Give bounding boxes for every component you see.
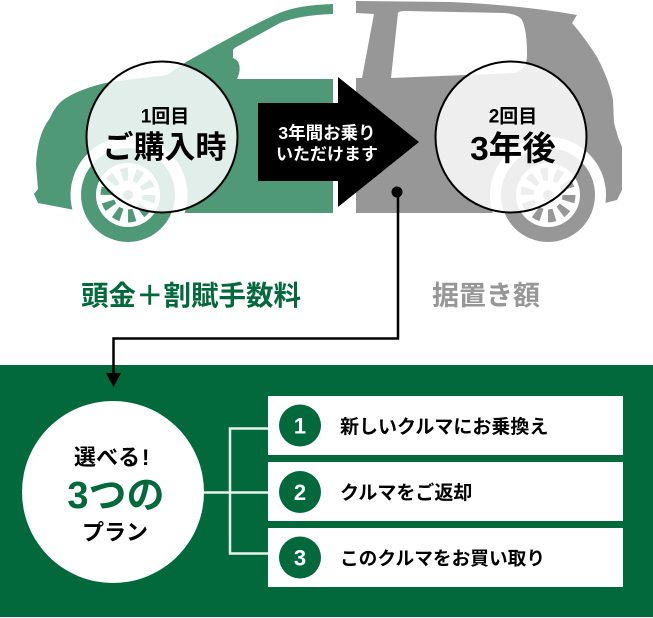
panel: plans bbox=[0, 365, 653, 617]
plan 1: 新しいクルマにお乗換え bbox=[340, 415, 548, 438]
plan 2: クルマをご返却 bbox=[340, 481, 472, 504]
arrow: three years of driving bbox=[258, 77, 419, 207]
circle: choose from 3 plans: プラン bbox=[82, 520, 148, 545]
circle: choose from 3 plans bbox=[22, 401, 204, 583]
plan 3 bbox=[268, 528, 623, 587]
circle: second payment bbox=[436, 62, 586, 212]
label: 2nd time: 2回目 bbox=[489, 106, 537, 128]
plan 2 bbox=[268, 462, 623, 521]
green car front half bbox=[34, 4, 333, 254]
label: 1st time: 1回目 bbox=[141, 106, 189, 128]
arrow: three years of driving: 3年間お乗り bbox=[278, 123, 376, 143]
heading: down payment and fees: 頭金＋割賦手数料 bbox=[81, 280, 301, 311]
plan 3: 3 bbox=[294, 546, 306, 570]
arrow: leader from deferred amount to plans bbox=[106, 186, 402, 387]
label: at purchase: ご購入時 bbox=[102, 130, 226, 165]
icon: rear wheel bbox=[501, 148, 595, 242]
plan 2: 2 bbox=[294, 480, 306, 505]
icon: front wheel bbox=[81, 148, 175, 242]
connector lines bbox=[204, 428, 268, 554]
heading: deferred amount: 据置き額 bbox=[432, 281, 540, 311]
circle: choose from 3 plans: 選べる! bbox=[74, 445, 149, 470]
circle: choose from 3 plans: 3つの bbox=[67, 475, 165, 517]
arrow: three years of driving: いただけます bbox=[276, 145, 378, 164]
plan 1 bbox=[268, 396, 623, 455]
circle: first payment bbox=[86, 62, 238, 212]
label: 3 years later: 3年後 bbox=[470, 131, 556, 168]
plan 3: このクルマをお買い取り bbox=[340, 548, 545, 569]
plan 1: 1 bbox=[294, 414, 306, 438]
gray car rear half bbox=[356, 1, 622, 253]
